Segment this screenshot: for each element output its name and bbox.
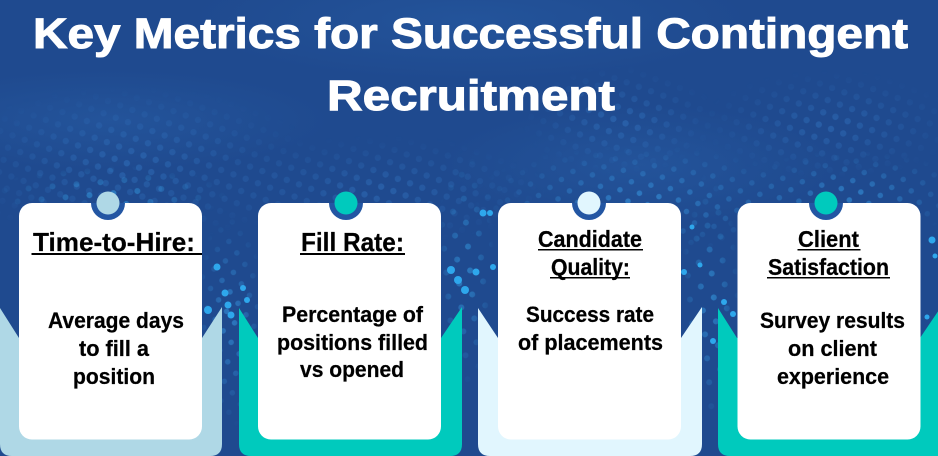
body text: position <box>73 364 155 389</box>
heading <box>538 226 643 280</box>
title <box>33 10 908 120</box>
body text: Success rate <box>526 302 654 327</box>
back shape: pale blue <box>478 307 702 456</box>
body text: Average days <box>48 308 184 333</box>
heading: Time-to-Hire: <box>33 227 195 257</box>
panel: time-to-hire <box>0 192 222 456</box>
body text <box>48 308 184 389</box>
title: Recruitment <box>327 72 615 120</box>
notch with pin <box>329 192 363 220</box>
card: white <box>738 203 920 440</box>
back shape: light blue <box>0 307 222 456</box>
heading: Quality: <box>551 254 630 280</box>
body text: Survey results <box>760 308 905 333</box>
title: Key Metrics for Successful Contingent <box>33 10 908 58</box>
card: white <box>258 203 441 440</box>
notch with pin <box>809 192 843 220</box>
body text: on client <box>788 336 877 361</box>
heading: Fill Rate: <box>301 227 404 257</box>
body text <box>518 302 663 355</box>
body text: experience <box>777 364 889 389</box>
body text: of placements <box>518 330 663 355</box>
notch with pin <box>91 192 125 220</box>
body text <box>277 302 428 382</box>
panel: fill rate <box>239 192 462 456</box>
body text: Percentage of <box>282 302 423 327</box>
heading <box>767 226 890 280</box>
body text: to fill a <box>79 336 149 361</box>
body text: positions filled <box>277 330 428 355</box>
card: white <box>19 203 202 440</box>
back shape: teal <box>239 307 462 456</box>
back shape: teal <box>718 307 938 456</box>
body text <box>760 308 905 389</box>
heading: Client <box>798 226 859 252</box>
panel: client satisfaction <box>718 192 938 456</box>
heading: Candidate <box>538 226 642 252</box>
body text: vs opened <box>300 357 404 382</box>
panel: candidate quality <box>478 192 702 456</box>
card: white <box>498 203 681 440</box>
heading: Satisfaction <box>768 254 889 280</box>
notch with pin <box>572 192 606 220</box>
